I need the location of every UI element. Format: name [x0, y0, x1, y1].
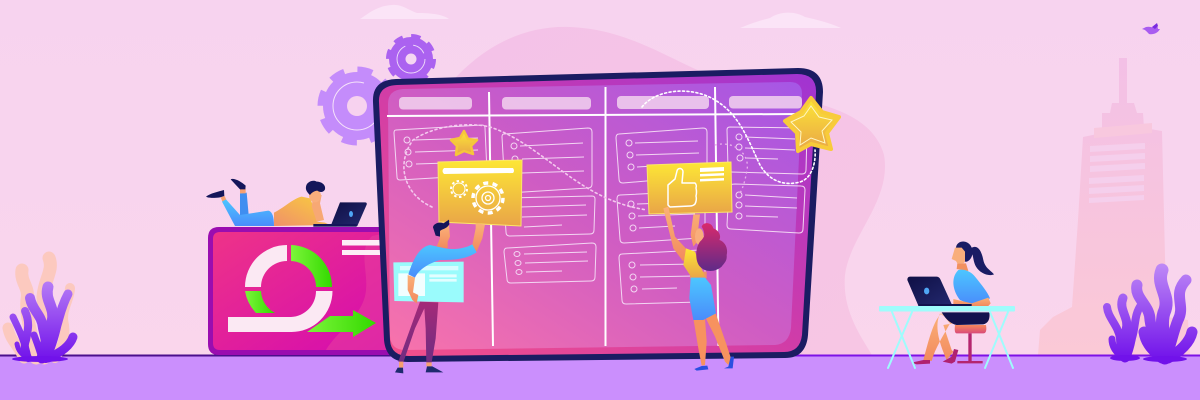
stool seat: [955, 325, 986, 333]
board surface: [388, 82, 802, 350]
task card 5: [616, 128, 707, 183]
ankles: [221, 189, 246, 202]
task card 1: [394, 125, 487, 180]
ground: [0, 354, 1200, 400]
skyscraper silhouette: [1038, 58, 1190, 355]
held card: [393, 262, 464, 302]
shirt: [408, 244, 477, 278]
laptop: [907, 277, 952, 306]
cloud right: [740, 13, 841, 28]
plant bases: [1110, 355, 1187, 362]
tower orange band: [1094, 123, 1152, 138]
sprint return loop: [228, 291, 332, 332]
task cards: [394, 125, 807, 304]
board bezel: [379, 74, 816, 356]
yellow card: gears: [438, 160, 522, 226]
right seaweed plants: [1107, 270, 1192, 362]
shirt: [953, 270, 990, 305]
forearm: [312, 195, 324, 222]
green arrow: [307, 310, 376, 337]
icon: large gear: [321, 70, 393, 142]
board frame: [373, 68, 823, 362]
dotted flow path faint right: [715, 144, 747, 193]
laptop base: [918, 304, 972, 306]
cloud left: [360, 5, 449, 19]
column headers: [399, 96, 802, 110]
shoes: [395, 366, 443, 373]
face: [952, 247, 968, 263]
legs: [923, 313, 953, 361]
waist: [690, 272, 707, 278]
front leg: [222, 199, 274, 226]
character: man holding card: [393, 220, 485, 373]
character: woman reaching up: [663, 207, 734, 371]
hair: [956, 242, 994, 275]
skirt: [942, 312, 990, 325]
laptop: [331, 202, 367, 226]
hair: [696, 223, 727, 271]
table legs: [888, 312, 1013, 368]
dotted flow path faint: [404, 125, 647, 210]
laptop logo: [924, 288, 929, 294]
shirt: [274, 197, 330, 226]
raised arm: [472, 223, 485, 252]
sprint ring top left: [245, 245, 287, 287]
dotted flow path bright: [642, 91, 815, 183]
panel: scrum card: [208, 227, 392, 355]
table top: [879, 306, 1015, 312]
face: [309, 189, 321, 202]
gear large outline: [473, 183, 503, 213]
background blob: [430, 27, 885, 355]
forearm: [953, 298, 991, 306]
shoes: [912, 349, 958, 364]
plant base: [12, 356, 68, 362]
stool pole: [957, 333, 983, 363]
shoes: [694, 357, 734, 371]
card frame: [208, 227, 392, 355]
purple fronds: [13, 287, 73, 358]
icon: large star: [785, 98, 839, 151]
character: man lying on card: [206, 179, 367, 227]
laptop logo: [349, 211, 353, 217]
face: [695, 228, 704, 245]
tower windows: [1089, 143, 1145, 203]
arms: [663, 207, 700, 262]
panel: kanban board: [373, 68, 823, 362]
sprint ring bottom left: [245, 291, 275, 313]
card face: [213, 232, 392, 350]
icon: small gear: [388, 36, 434, 82]
card title bar: [442, 168, 514, 174]
legs: [693, 313, 731, 366]
laptop base: [313, 224, 357, 227]
gear small outline: [451, 181, 467, 197]
neck: [957, 263, 968, 271]
left seaweed plant: [8, 258, 73, 362]
task card 6: [617, 191, 705, 243]
card bars: [342, 240, 382, 255]
task card 9: [727, 184, 805, 233]
task card 2: [502, 128, 592, 193]
sprint ring top right: [291, 245, 332, 287]
card highlight blob: [326, 232, 392, 350]
hair: [433, 220, 449, 237]
column dividers: [387, 87, 801, 346]
neck and face: [437, 225, 450, 248]
lower shoe: [206, 190, 224, 198]
lower arm: [408, 275, 418, 303]
icon: small star: [451, 131, 477, 155]
seated woman: [907, 242, 994, 364]
text bars: [700, 167, 724, 182]
task card 3: [504, 196, 595, 236]
back leg: [240, 193, 249, 217]
yellow card: thumbs up: [647, 162, 732, 214]
icon: bird: [1142, 23, 1160, 34]
task card 4: [504, 243, 596, 283]
task card 7: [619, 250, 705, 304]
skirt: [689, 278, 716, 320]
thumbs up icon: [668, 168, 696, 207]
ankles: [399, 362, 432, 368]
peach fronds behind: [8, 258, 70, 358]
top: [683, 248, 705, 278]
legs: [398, 302, 438, 362]
upper shoe: [231, 179, 246, 189]
hair: [306, 181, 325, 195]
task card 8: [727, 127, 807, 174]
desk and seated woman: [879, 242, 1015, 368]
